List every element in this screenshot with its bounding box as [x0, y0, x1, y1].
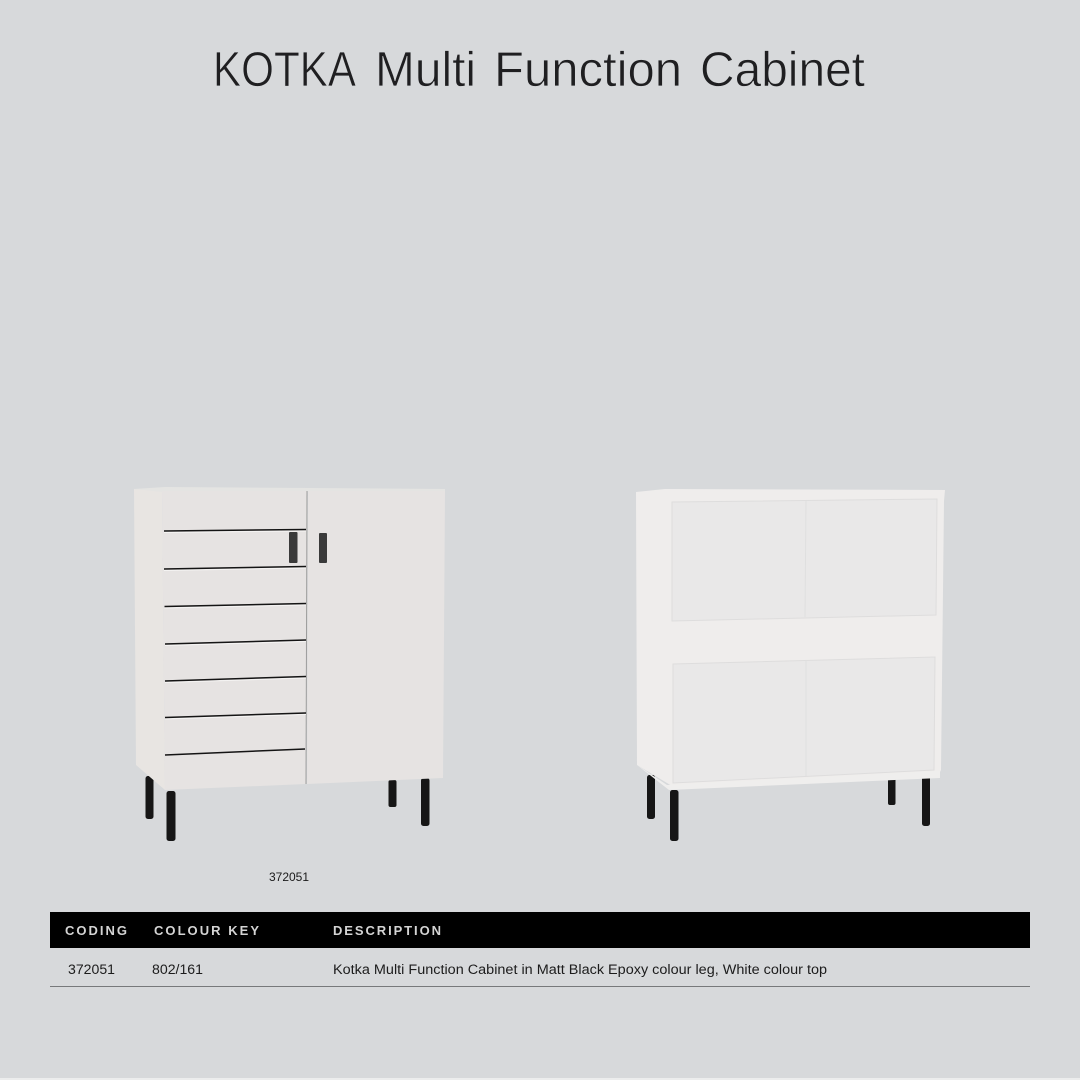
table rule: [50, 986, 1030, 987]
drawer front panel: [162, 491, 307, 790]
table header bar: [50, 912, 1030, 948]
leg: rear left: [146, 776, 154, 819]
spec table: [50, 912, 1030, 987]
leg: front right: [421, 778, 430, 826]
door divider: [306, 491, 307, 784]
drawer gap highlights: [164, 531, 306, 719]
header: description: DESCRIPTION: [333, 923, 441, 938]
title: Cabinet: [700, 43, 865, 97]
cabinet side panel: [134, 489, 165, 790]
cell: code: 372051: [68, 961, 115, 977]
title: Function: [494, 43, 682, 97]
header: coding: CODING: [65, 923, 127, 938]
cell: colour key: 802/161: [152, 961, 203, 977]
leg: front right: [922, 776, 930, 826]
cabinet body: [636, 489, 945, 786]
leg: rear right: [388, 780, 396, 807]
handle: door: [319, 533, 327, 563]
leg: front left: [670, 790, 678, 841]
cabinet door: [307, 491, 445, 784]
title: Multi: [375, 43, 476, 97]
cabinet back view: [636, 489, 945, 841]
cabinet front view: [134, 487, 445, 841]
header: colour key: COLOUR KEY: [154, 923, 259, 938]
lower back panels: [673, 657, 935, 783]
leg: rear right: [888, 778, 896, 805]
upper back panels: [672, 499, 937, 621]
leg: front left: [166, 791, 176, 841]
leg: rear left: [647, 775, 655, 819]
handle: drawer: [289, 532, 298, 563]
product code label: 372051: [269, 870, 309, 884]
cabinet base edge: [637, 765, 940, 790]
title: KOTKA: [213, 43, 356, 97]
cell: description: Kotka Multi Function Cabinet in Matt Black Epoxy colour leg, White colour top: [333, 962, 827, 977]
title: [213, 43, 865, 97]
cabinet top edge: [134, 487, 445, 492]
drawer gaps: [164, 530, 306, 755]
panel seams: [805, 501, 806, 776]
